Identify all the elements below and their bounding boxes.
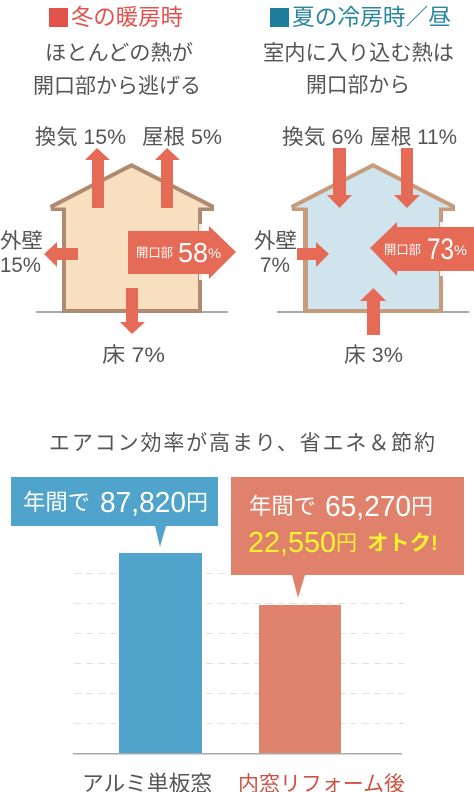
arrow: floor out [120, 288, 145, 334]
callout: after cost and savings: オトク! [367, 532, 438, 555]
text: winter description: 開口部から逃げる [33, 75, 201, 98]
panel: summer cooling [254, 5, 474, 367]
callout: after cost and savings: 円 [336, 532, 357, 555]
text: winter description: ほとんどの熱が [45, 42, 193, 65]
arrow: openings out 58%: 開口部 [136, 246, 173, 260]
panel: winter heating [0, 5, 236, 367]
arrow: openings in 73%: 開口部 [384, 243, 421, 257]
heading: winter: 冬の暖房時 [71, 5, 183, 30]
text: summer description: 開口部から [306, 74, 410, 97]
text: summer description [263, 42, 454, 97]
arrow: openings out 58%: 58 [178, 237, 208, 268]
callout: before cost [11, 477, 218, 547]
house: winter [36, 163, 228, 313]
callout: before cost: 年間で [23, 490, 90, 515]
arrow: ventilation in [327, 148, 352, 208]
bar: after inner window [259, 605, 341, 754]
arrow: openings in 73% [370, 222, 474, 276]
callout: after cost and savings [231, 477, 464, 598]
arrow: openings in 73%: % [454, 242, 467, 258]
arrow: roof in [394, 148, 420, 208]
arrow: floor in [360, 288, 386, 335]
label: floor 3%: 床 3% [344, 344, 403, 367]
heading: summer: 夏の冷房時／昼 [292, 5, 451, 30]
callout: after cost and savings: 65,270 [325, 491, 411, 523]
label: ventilation 6%: 換気 6% [282, 126, 363, 149]
label: ventilation 15%: 換気 15% [35, 126, 126, 149]
arrow: wall out [44, 242, 78, 267]
callout: after cost and savings: 22,550 [248, 527, 336, 559]
callout: before cost: 円 [186, 490, 208, 515]
arrow: openings out 58% [128, 226, 236, 279]
label: roof 11%: 屋根 11% [370, 126, 457, 149]
label: roof 5%: 屋根 5% [142, 126, 222, 149]
bar: aluminum single pane [119, 553, 202, 754]
arrow: wall in [297, 242, 329, 267]
arrow: openings in 73%: 73 [427, 233, 454, 266]
label: floor 7%: 床 7% [102, 344, 165, 367]
label: wall 15%: 外壁 [0, 230, 43, 253]
axis [73, 753, 402, 754]
callout: after cost and savings: 年間で [249, 494, 316, 519]
label: wall 7%: 7% [260, 254, 290, 277]
arrow: ventilation out [85, 148, 110, 208]
arrow: openings out 58%: % [208, 245, 221, 261]
text: winter description [33, 42, 201, 98]
callout: before cost: 87,820 [100, 487, 186, 519]
callout: after cost and savings: 円 [411, 494, 433, 519]
label: wall 15%: 15% [0, 254, 41, 277]
label: wall 15% [0, 230, 43, 277]
label: wall 7% [254, 230, 297, 277]
label: wall 7%: 外壁 [254, 230, 297, 253]
text: summer description: 室内に入り込む熱は [263, 42, 454, 65]
panel: annual cost chart [11, 477, 464, 792]
house: summer [277, 163, 469, 313]
title: efficiency: エアコン効率が高まり、省エネ＆節約 [49, 432, 435, 455]
arrow: roof out [155, 148, 180, 208]
